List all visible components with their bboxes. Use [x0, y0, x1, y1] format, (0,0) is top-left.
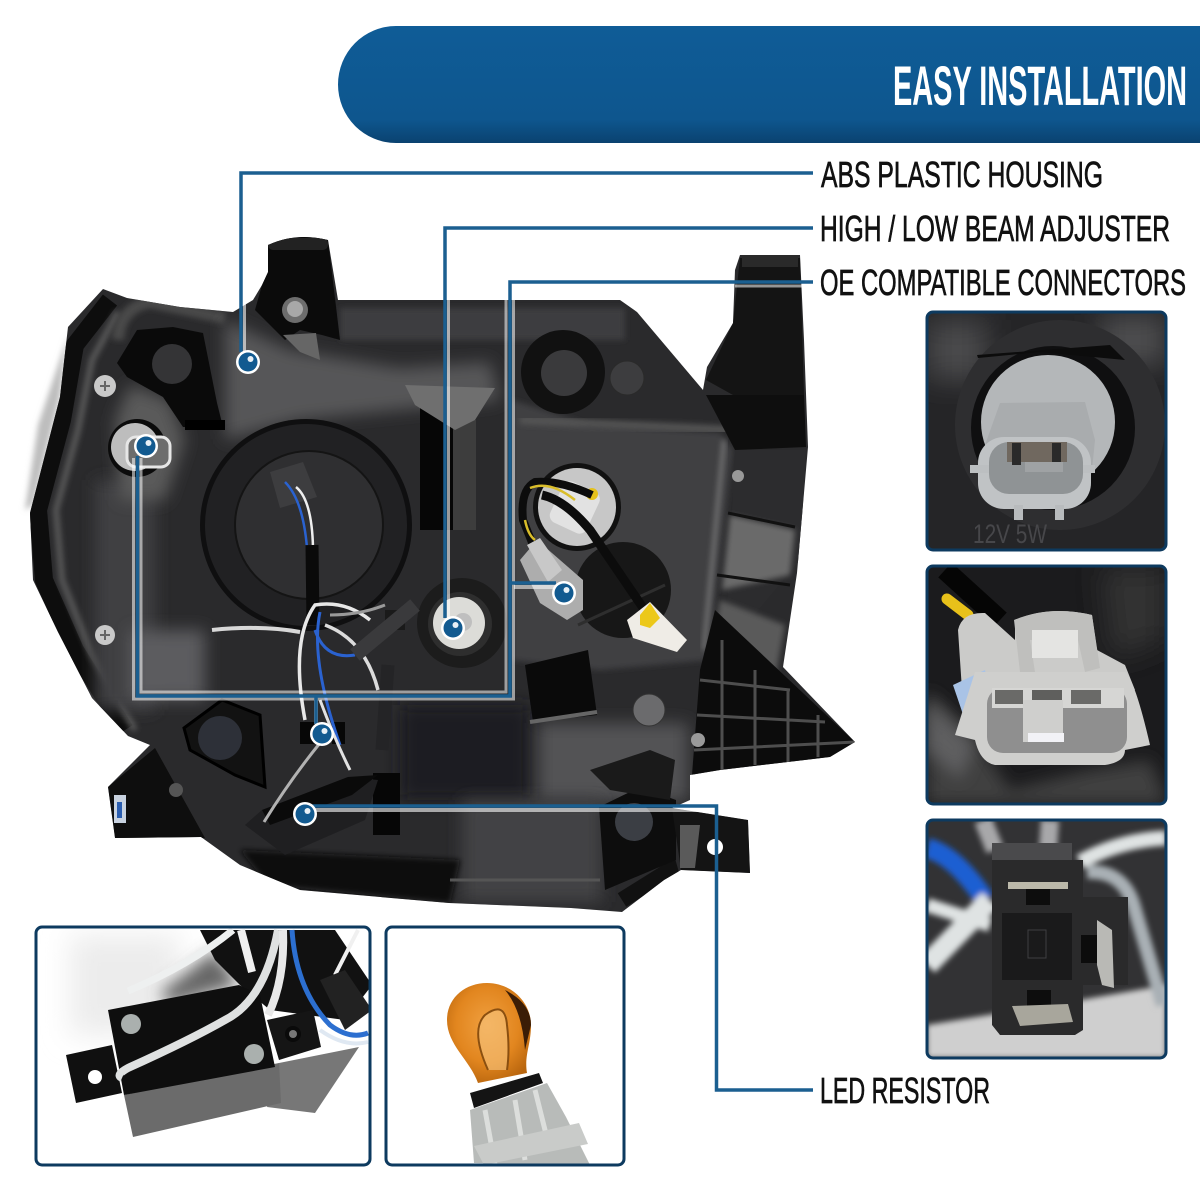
left flap — [108, 748, 205, 838]
marker dot: resistor — [293, 802, 317, 826]
callout line: beam adjuster — [445, 228, 813, 618]
top mounting bracket — [255, 237, 340, 360]
side marker socket — [108, 419, 170, 477]
housing screws — [94, 301, 303, 645]
lower rectangular port — [525, 650, 597, 722]
marker dot: side socket — [134, 434, 158, 458]
callout line: LED resistor — [310, 806, 813, 1090]
turn signal socket and wires — [520, 463, 687, 652]
wiring harness — [212, 482, 415, 770]
rear vent cap — [521, 330, 644, 414]
panel: LED resistor close-up — [36, 927, 372, 1165]
beam adjuster — [417, 578, 507, 668]
LED resistor module — [245, 743, 400, 855]
right mounting tab — [672, 808, 750, 873]
marker dot: connector — [552, 581, 576, 605]
large low beam dust cap — [200, 419, 412, 631]
right mounting bracket — [706, 255, 806, 680]
panel: three-pin connector — [927, 566, 1166, 804]
label: LED resistor: LED RESISTOR — [820, 1070, 990, 1111]
header banner — [338, 26, 1200, 143]
panel: resistor terminal plug — [927, 820, 1166, 1058]
lattice bracket — [691, 610, 855, 775]
adjuster bracket — [385, 385, 495, 630]
lower right port — [590, 694, 676, 890]
panel: two-pin bulb socket: 12V 5W — [973, 519, 1047, 549]
marker dot: harness — [310, 722, 334, 746]
lower hex port — [184, 700, 265, 787]
panel: two-pin bulb socket — [927, 312, 1166, 550]
marker dot: housing — [236, 350, 260, 374]
panel: amber bulb — [386, 927, 624, 1165]
callout line: OE connectors — [134, 282, 813, 724]
marker dot: adjuster — [441, 616, 465, 640]
housing shading — [38, 300, 733, 903]
rear bulb pocket — [117, 327, 225, 430]
callout line: ABS plastic housing — [241, 173, 813, 352]
headlight housing photo — [25, 237, 855, 912]
